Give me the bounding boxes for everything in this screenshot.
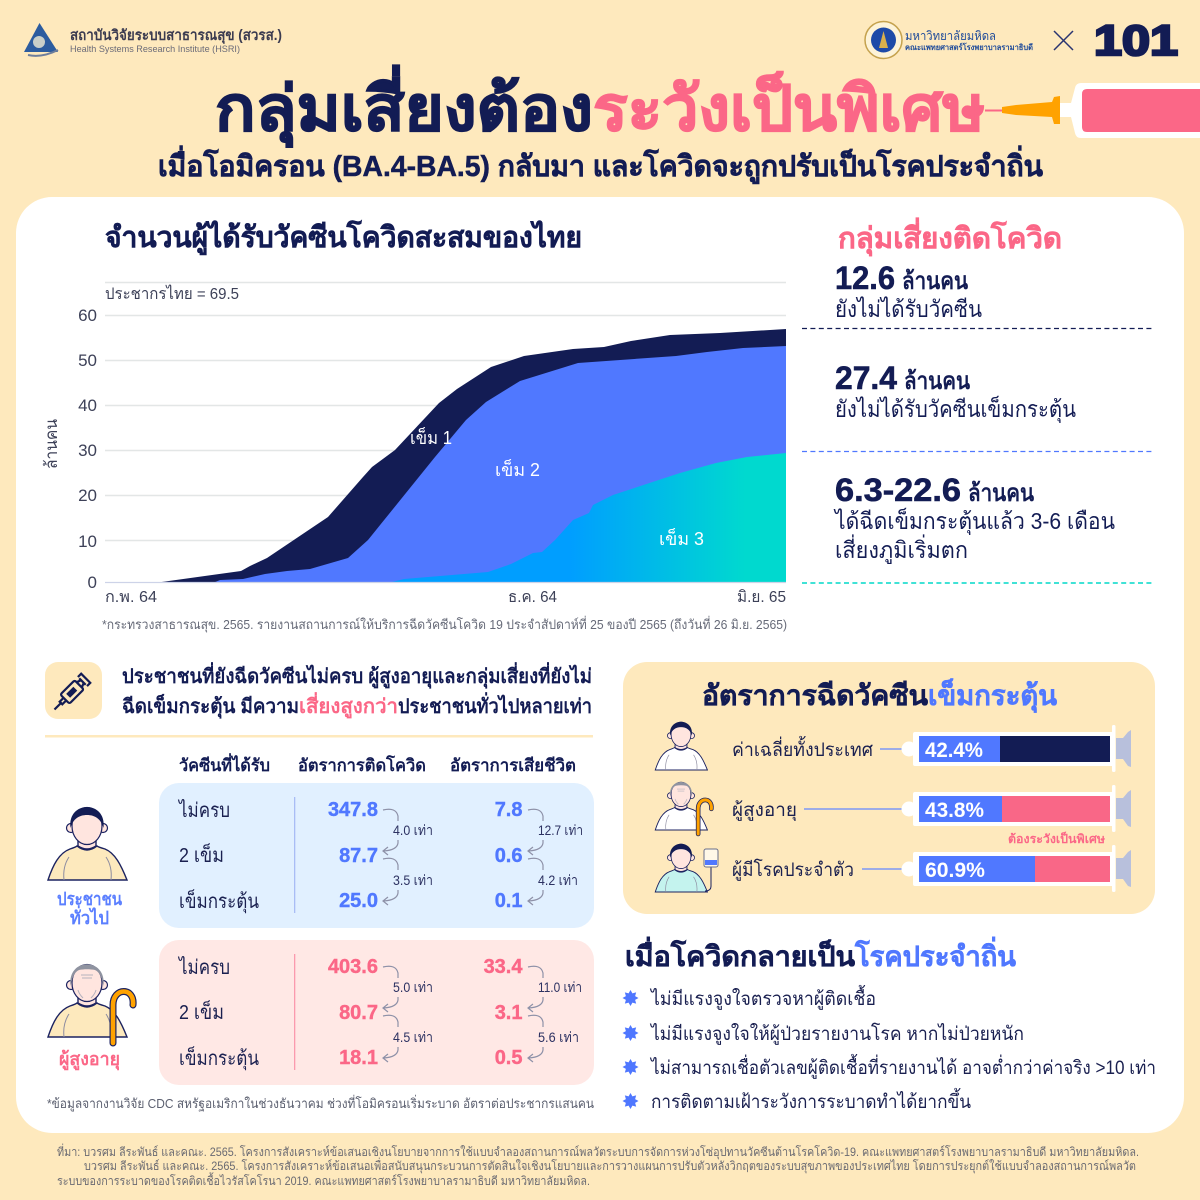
table headers: วัคซีนที่ได้รับ (179, 753, 270, 775)
infection rates: 347.8 (328, 799, 378, 821)
row: chronic disease (655, 844, 1131, 892)
booster heading (702, 678, 1057, 713)
stat: 12.6 million: ยังไม่ได้รับวัคซีน (835, 296, 982, 322)
stat: 6.3-22.6 million: 6.3-22.6 (835, 472, 961, 508)
icon: general population person (48, 807, 127, 880)
vaccine rows: 2 เข็ม (179, 842, 224, 867)
series: dose 3 (390, 453, 786, 582)
x axis labels (105, 589, 786, 606)
organisation name (70, 27, 282, 55)
Ramathibodi text: คณะแพทยศาสตร์โรงพยาบาลรามาธิบดี (905, 42, 1033, 52)
title: กลุ่มเสี่ยงต้อง (215, 65, 593, 147)
row: elderly (655, 782, 1131, 834)
organisation name: สถาบันวิจัยระบบสาธารณสุข (สวรส.) (70, 27, 282, 44)
y axis: 30 (78, 441, 97, 460)
multiply sign (1054, 31, 1073, 50)
series labels: เข็ม 3 (659, 527, 704, 549)
subtitle: เมื่อโอมิครอน (BA.4-BA.5) กลับมา และโควิดจะถูกปรับเป็นโรคประจำถิ่น (158, 145, 1043, 184)
vaccine rows: ไม่ครบ (177, 956, 230, 979)
row: national average: 42.4% (925, 739, 983, 762)
row: national average: ค่าเฉลี่ยทั้งประเทศ (732, 736, 873, 761)
intro text: ประชาชนที่ยังฉีดวัคซีนไม่ครบ ผู้สูงอายุและกลุ่มเสี่ยงที่ยังไม่ (122, 661, 592, 690)
stat: 6.3-22.6 million: เสี่ยงภูมิเริ่มตก (835, 534, 968, 564)
infection rates (328, 956, 378, 1069)
infection rates: 87.7 (339, 845, 378, 867)
ratio labels: 3.5 เท่า (393, 872, 433, 888)
y axis: 10 (78, 532, 97, 551)
label: general population (57, 889, 123, 928)
ratio labels: 4.0 เท่า (393, 822, 433, 838)
series: dose 2 (214, 346, 786, 582)
panel: risk groups (802, 217, 1152, 583)
death rates: 0.6 (495, 845, 522, 867)
vaccine rows: ไม่ครบ (177, 799, 230, 822)
Ramathibodi text: มหาวิทยาลัยมหิดล (905, 29, 996, 43)
vaccine rows: 2 เข็ม (179, 999, 224, 1024)
death rates: 0.5 (495, 1047, 522, 1069)
area chart (105, 282, 786, 582)
table headers (179, 753, 576, 775)
table headers: อัตราการติดโควิด (298, 755, 426, 775)
booster heading: อัตราการฉีดวัคซีน (702, 680, 928, 711)
title (215, 65, 985, 147)
Ramathibodi text (905, 29, 1033, 52)
intro text: เสี่ยงสูงกว่า (299, 691, 398, 720)
stat: 6.3-22.6 million: ได้ฉีดเข็มกระตุ้นแล้ว 3-6 เดือน (833, 506, 1115, 535)
icon: HSRI triangle logo (24, 23, 58, 56)
bullet list: ไม่มีแรงจูงใจให้ผู้ป่วยรายงานโรค หากไม่ป่วยหนัก (649, 1022, 1024, 1045)
intro text: ประชาชนทั่วไปหลายเท่า (398, 691, 592, 718)
bullet list: การติดตามเฝ้าระวังการระบาดทำได้ยากขึ้น (651, 1088, 971, 1113)
series labels: เข็ม 2 (495, 458, 540, 480)
ratio labels: 5.0 เท่า (393, 979, 433, 995)
HSRI logo and name (24, 23, 282, 56)
x axis labels: มิ.ย. 65 (737, 589, 786, 606)
callout: extra caution: ต้องระวังเป็นพิเศษ (1008, 831, 1105, 846)
series labels (410, 426, 704, 549)
icon: syringe badge (45, 662, 102, 719)
infection rates: 25.0 (339, 890, 378, 912)
infection rates: 18.1 (339, 1047, 378, 1069)
label: elderly: ผู้สูงอายุ (59, 1049, 120, 1071)
ratio labels (393, 822, 583, 888)
table headers: อัตราการเสียชีวิต (450, 755, 576, 775)
stat: 6.3-22.6 million (833, 472, 1115, 564)
row: chronic disease: ผู้มีโรคประจำตัว (732, 858, 854, 881)
risk heading: กลุ่มเสี่ยงติดโควิด (838, 217, 1062, 256)
ratio labels (393, 979, 582, 1045)
death rates (484, 956, 523, 1069)
icon: title syringe (985, 83, 1200, 138)
y axis: 60 (78, 306, 97, 325)
y axis: 0 (88, 573, 97, 592)
bullet list: ไม่สามารถเชื่อตัวเลขผู้ติดเชื้อที่รายงานได้ อาจต่ำกว่าค่าจริง >10 เท่า (649, 1054, 1156, 1079)
population label: ประชากรไทย = 69.5 (105, 284, 239, 303)
icon: Mahidol seal (865, 22, 902, 58)
y axis: 40 (78, 396, 97, 415)
intro text: ฉีดเข็มกระตุ้น มีความ (122, 693, 299, 719)
infection rates: 403.6 (328, 956, 378, 978)
y axis: 50 (78, 351, 97, 370)
table footnote: *ข้อมูลจากงานวิจัย CDC สหรัฐอเมริกาในช่วงธันวาคม ช่วงที่โอมิครอนเริ่มระบาด อัตราต่อประชากรแสนคน (47, 1095, 594, 1112)
ratio labels: 4.2 เท่า (538, 872, 578, 888)
stat: 27.4 million: ยังไม่ได้รับวัคซีนเข็มกระตุ้น (835, 394, 1076, 423)
stat: 27.4 million (835, 360, 1076, 423)
stat: 12.6 million (835, 260, 982, 322)
bullet list: ไม่มีแรงจูงใจตรวจหาผู้ติดเชื้อ (649, 985, 876, 1010)
vaccine rows: เข็มกระตุ้น (179, 888, 259, 914)
infection rates: 80.7 (339, 1002, 378, 1024)
stat: 12.6 million: ล้านคน (902, 268, 968, 295)
panel: elderly rates (159, 940, 594, 1085)
booster heading: เข็มกระตุ้น (928, 678, 1057, 713)
label: general population: ประชาชน (57, 889, 123, 909)
panel: general population rates (159, 783, 594, 928)
label: general population: ทั่วไป (70, 905, 109, 928)
source references: ระบบของการระบาดของโรคติดเชื้อไวรัสโคโรนา 2019. คณะแพทยศาสตร์โรงพยาบาลรามาธิบดี มหาวิทยาลัยมหิดล. (57, 1172, 590, 1188)
y axis: 20 (78, 486, 97, 505)
panel: white content card (16, 197, 1184, 1133)
ratio labels: 12.7 เท่า (538, 822, 583, 838)
endemic heading: โรคประจำถิ่น (854, 936, 1016, 972)
stat: 27.4 million: 27.4 (835, 360, 897, 396)
organisation name: Health Systems Research Institute (HSRI) (70, 44, 240, 55)
chart title: จำนวนผู้ได้รับวัคซีนโควิดสะสมของไทย (105, 219, 582, 255)
title: ระวังเป็นพิเศษ (593, 71, 985, 144)
death rates: 3.1 (495, 1002, 522, 1024)
endemic heading (625, 936, 1016, 972)
x axis labels: ก.พ. 64 (105, 589, 157, 606)
panel: risk table (45, 661, 594, 1112)
partner logos (865, 17, 1178, 65)
y axis (78, 306, 97, 592)
death rates: 0.1 (495, 890, 522, 912)
death rates: 33.4 (484, 956, 523, 978)
source references (57, 1143, 1139, 1188)
y axis title: ล้านคน (42, 419, 61, 469)
stat: 27.4 million: ล้านคน (904, 368, 970, 395)
vaccine rows (177, 799, 259, 914)
bullet icons (622, 990, 638, 1109)
x axis labels: ธ.ค. 64 (508, 589, 557, 606)
ratio arrows (383, 966, 543, 1062)
endemic heading: เมื่อโควิดกลายเป็น (625, 936, 855, 972)
panel: booster rate (623, 662, 1155, 914)
ratio labels: 5.6 เท่า (538, 1029, 579, 1045)
death rates (495, 799, 522, 912)
panel: when COVID becomes endemic (622, 936, 1156, 1113)
vaccine rows (177, 956, 259, 1071)
row: national average (655, 722, 1131, 772)
vaccine rows: เข็มกระตุ้น (179, 1045, 259, 1071)
infection rates (328, 799, 378, 912)
bullet list (649, 985, 1156, 1113)
101 logo: 101 (1094, 17, 1178, 65)
row: chronic disease: 60.9% (925, 859, 985, 882)
ratio labels: 11.0 เท่า (538, 979, 582, 995)
intro text (122, 661, 592, 720)
row: elderly: ผู้สูงอายุ (732, 800, 797, 822)
ratio labels: 4.5 เท่า (393, 1029, 433, 1045)
death rates: 7.8 (495, 799, 522, 821)
series labels: เข็ม 1 (410, 426, 452, 448)
row: elderly: 43.8% (925, 799, 984, 822)
panel: cumulative vaccination chart (42, 219, 787, 633)
ratio arrows (383, 809, 543, 905)
icon: elderly person with cane (48, 964, 133, 1043)
chart source: *กระทรวงสาธารณสุข. 2565. รายงานสถานการณ์ให้บริการฉีดวัคซีนโควิด 19 ประจำสัปดาห์ที่ 25 ของปี 2565 (ถึงวันที่ 26 มิ.ย. 2565) (102, 616, 787, 633)
series: dose 1 (158, 329, 786, 582)
stat: 12.6 million: 12.6 (835, 260, 895, 296)
stat: 6.3-22.6 million: ล้านคน (968, 480, 1034, 507)
